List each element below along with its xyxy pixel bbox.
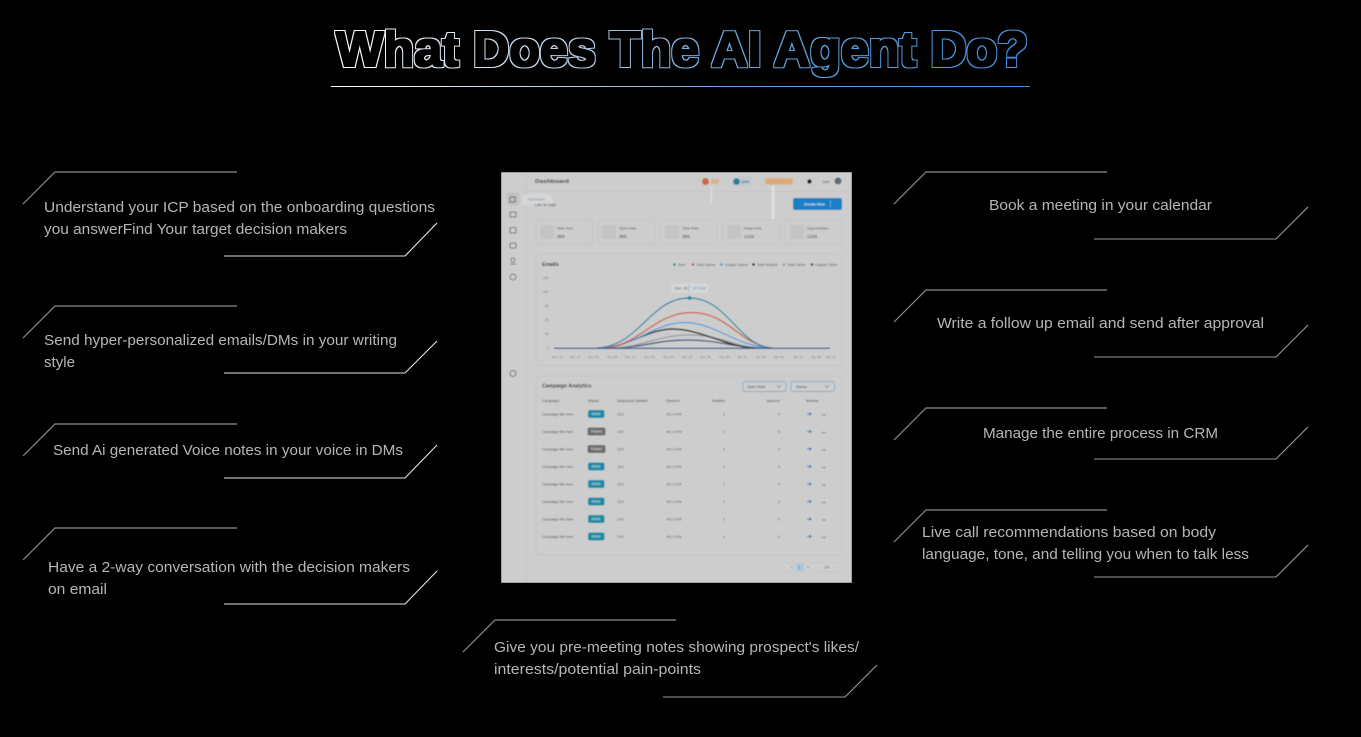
callout: follow up email	[894, 290, 1308, 357]
panel: dashboard screenshot	[501, 172, 852, 583]
table rows: 12/1	[617, 465, 624, 469]
callout: understand ICP: you answerFind Your target decision makers	[44, 222, 347, 238]
table rows	[542, 410, 827, 540]
table rows: 1	[723, 535, 725, 539]
callout: voice notes	[23, 424, 437, 478]
table rows: 12/1	[617, 535, 624, 539]
dashboard header	[535, 176, 842, 220]
stat cards: 356	[557, 234, 565, 239]
line chart: emails: Dec. 28	[700, 355, 711, 359]
table rows: 12/1	[617, 518, 624, 522]
stat cards: Reply Rate	[744, 226, 762, 230]
table rows: 1	[723, 430, 725, 434]
callout: manage in CRM	[894, 408, 1308, 459]
table header: Actions	[806, 399, 819, 403]
callout: personalized emails: Send hyper-personalized emails/DMs in your writing	[44, 333, 397, 349]
table header	[542, 399, 819, 403]
table rows: 0	[778, 412, 780, 416]
line chart: emails: 80	[545, 304, 549, 308]
line chart: emails: 0	[547, 346, 549, 350]
chart legend: Unique Clicks	[815, 263, 837, 267]
table rows: 1	[723, 465, 725, 469]
line chart: emails: Dec. 18	[607, 355, 618, 359]
pagination: 100	[824, 566, 830, 570]
line chart: emails: Dec. 24	[663, 355, 674, 359]
chart tooltip: 327,549	[692, 286, 706, 290]
table rows: Campaign title here	[542, 412, 573, 416]
line chart: emails: 100	[543, 290, 549, 294]
dashboard header: John	[822, 180, 829, 184]
callout: pre-meeting notes: Give you pre-meeting notes showing prospect's likes/	[494, 640, 860, 656]
table rows: 0	[778, 500, 780, 504]
callout: personalized emails	[23, 306, 437, 373]
line chart: emails: Jan. 05	[774, 355, 784, 359]
table rows: Campaign title here	[542, 518, 573, 522]
stat cards: Opportunities	[807, 226, 829, 230]
table rows: 1	[723, 412, 725, 416]
callout: 2-way conversation: Have a 2-way conversation with the decision makers	[48, 560, 410, 576]
table rows: 12/1	[617, 412, 624, 416]
table rows: Active	[592, 412, 601, 416]
table header: Sequence Started	[617, 399, 647, 403]
table rows: •••	[822, 518, 827, 522]
table rows: •••	[822, 483, 827, 487]
table rows: 1	[723, 518, 725, 522]
callout: live call recommendations: language, tone, and telling you when to talk less	[922, 547, 1249, 563]
table rows: •••	[822, 536, 827, 540]
table rows: Campaign title here	[542, 448, 573, 452]
pagination: ›	[837, 566, 838, 570]
chart legend: Total Opens	[696, 263, 715, 267]
table rows: 12/1	[617, 430, 624, 434]
stat cards: Click Rate	[682, 226, 698, 230]
table rows: 0	[778, 482, 780, 486]
table rows: 40 | 4.3%	[666, 465, 682, 469]
chart legend	[673, 263, 837, 267]
sidebar icons	[507, 193, 552, 376]
table rows: 1	[723, 482, 725, 486]
table rows: 40 | 4.3%	[666, 412, 682, 416]
table rows: 40 | 4.3%	[666, 500, 682, 504]
stat cards: Total Sent	[557, 226, 573, 230]
line chart: emails: Dec. 16	[588, 355, 599, 359]
table rows: 1	[723, 500, 725, 504]
table rows: 40 | 4.3%	[666, 518, 682, 522]
chart legend: Unique Opens	[725, 263, 748, 267]
dashboard header: 1234	[741, 180, 749, 184]
table: campaign analytics: Campaign Analytics	[542, 384, 592, 390]
table rows: Campaign title here	[542, 482, 573, 486]
line chart: emails: Dec. 20	[625, 355, 636, 359]
pagination: 2	[798, 566, 800, 570]
callout: book a meeting	[894, 172, 1308, 239]
line chart: emails: 120	[543, 276, 549, 280]
chart legend: Total Replies	[757, 263, 778, 267]
pagination: ...	[815, 566, 818, 570]
table rows: •••	[822, 430, 827, 434]
line chart: emails: Dec. 14	[570, 355, 581, 359]
table rows: 0	[778, 430, 780, 434]
stat cards: 356	[682, 234, 690, 239]
callout: pre-meeting notes: interests/potential pain-points	[494, 662, 701, 678]
table rows: Campaign title here	[542, 430, 573, 434]
table rows: Active	[592, 482, 601, 486]
create new button: Last 30 Days	[535, 203, 556, 207]
table rows: Active	[592, 465, 601, 469]
callout: book a meeting: Book a meeting in your calendar	[989, 198, 1212, 214]
line chart: emails: 40	[545, 332, 549, 336]
table rows: Campaign title here	[542, 500, 573, 504]
create new button: Create New	[804, 202, 825, 206]
pagination: 3	[807, 566, 809, 570]
pagination: 1	[791, 566, 793, 570]
line chart: emails: Jan. 01	[737, 355, 747, 359]
title: What Does The AI Agent Do?	[336, 23, 1028, 77]
callout: live call recommendations	[894, 510, 1308, 577]
line chart: emails: Jan. 11	[826, 355, 836, 359]
table rows: Paused	[591, 447, 602, 451]
table header: Bounce	[767, 399, 780, 403]
chart tooltip	[671, 284, 708, 293]
table rows: 40 | 4.3%	[666, 448, 682, 452]
dashboard header: Dashboard	[535, 179, 570, 185]
table header: Campaign	[542, 399, 559, 403]
stat cards: 356	[619, 234, 627, 239]
chart legend: Sent	[678, 263, 685, 267]
table header: Status	[588, 399, 599, 403]
callout: voice notes: Send Ai generated Voice notes in your voice in DMs	[53, 443, 403, 459]
table rows: Active	[592, 500, 601, 504]
pagination	[780, 564, 842, 571]
table rows: 1	[723, 448, 725, 452]
table rows: 40 | 4.3%	[666, 482, 682, 486]
table header: Replied	[712, 399, 725, 403]
table rows: •••	[822, 448, 827, 452]
table rows: 12/1	[617, 500, 624, 504]
callout: 2-way conversation: on email	[48, 582, 107, 598]
table rows: 12/1	[617, 482, 624, 486]
table: campaign analytics: Open Rate	[747, 385, 765, 389]
table rows: Active	[592, 535, 601, 539]
stat cards: 1234	[744, 234, 755, 239]
line chart: emails: Emails	[542, 262, 559, 268]
table rows: Paused	[591, 430, 602, 434]
callout: understand ICP	[23, 172, 437, 256]
line chart: emails: Jan. 07	[793, 355, 803, 359]
callout: manage in CRM: Manage the entire process in CRM	[983, 426, 1218, 442]
table rows: Campaign title here	[542, 465, 573, 469]
table rows: 40 | 4.3%	[666, 535, 682, 539]
table header: Opened	[666, 399, 680, 403]
line chart: emails: Dec. 12	[552, 355, 563, 359]
table rows: •••	[822, 466, 827, 470]
table rows: 0	[778, 448, 780, 452]
callout: understand ICP: Understand your ICP based on the onboarding questions	[44, 200, 435, 216]
table rows: Active	[592, 517, 601, 521]
callout: personalized emails: style	[44, 355, 75, 371]
line chart: emails: 60	[545, 318, 549, 322]
pagination: ‹	[783, 566, 784, 570]
line chart: emails: Dec. 26	[682, 355, 693, 359]
table rows: Campaign title here	[542, 535, 573, 539]
line chart: emails: Jan. 03	[756, 355, 766, 359]
callout: follow up email: Write a follow up email and send after approval	[937, 316, 1264, 332]
stat cards: 1234	[807, 234, 818, 239]
create new button	[535, 198, 842, 210]
table rows: 0	[778, 465, 780, 469]
table rows: •••	[822, 500, 827, 504]
chart legend: Total Clicks	[787, 263, 805, 267]
table rows: 0	[778, 518, 780, 522]
line chart: emails: Dec. 30	[719, 355, 730, 359]
sidebar icons: Dashboard	[528, 198, 545, 202]
line chart: emails: Dec. 22	[644, 355, 655, 359]
callout: live call recommendations: Live call recommendations based on body	[922, 525, 1217, 541]
table rows: 40 | 4.3%	[666, 430, 682, 434]
chart tooltip: Dec. 26	[675, 286, 687, 290]
table rows: 12/1	[617, 448, 624, 452]
stat cards	[536, 220, 842, 244]
callout: pre-meeting notes	[463, 620, 877, 697]
table rows: 0	[778, 535, 780, 539]
table rows: •••	[822, 413, 827, 417]
callout: 2-way conversation	[23, 528, 437, 604]
line chart: emails: Jan. 09	[811, 355, 821, 359]
table: campaign analytics	[536, 376, 842, 555]
table: campaign analytics: Status	[796, 385, 807, 389]
line chart: emails	[536, 254, 842, 366]
stat cards: Open Rate	[619, 226, 636, 230]
